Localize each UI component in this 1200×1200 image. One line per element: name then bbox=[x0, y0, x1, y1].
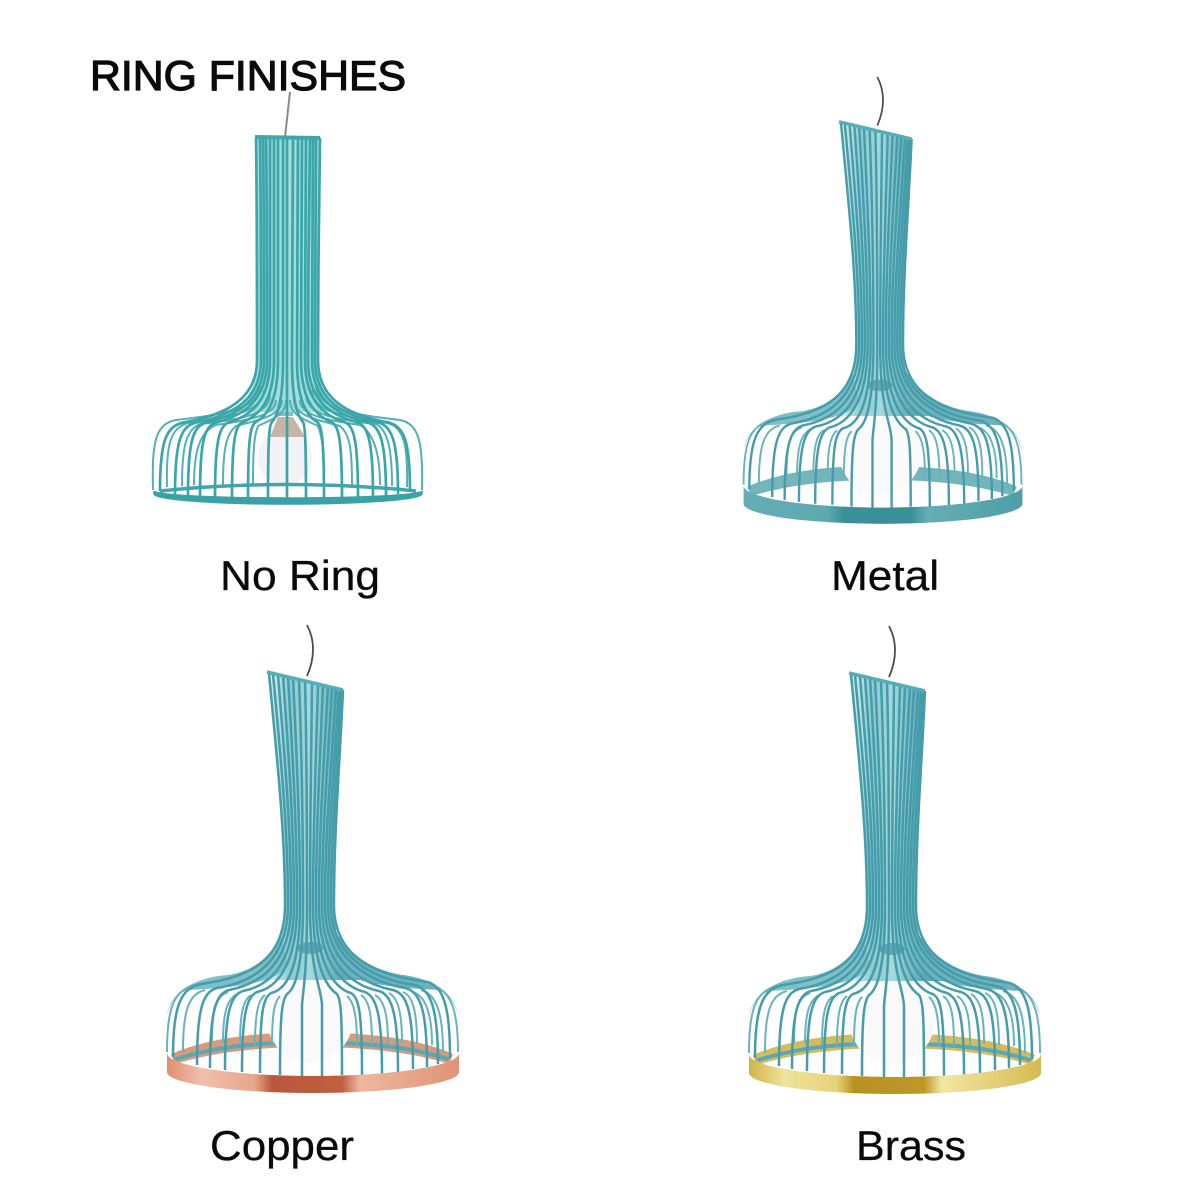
copper ring band bbox=[167, 1053, 459, 1093]
neck fill bbox=[223, 137, 348, 412]
title: RING FINISHES bbox=[90, 52, 406, 99]
wires and neck bbox=[744, 77, 1021, 508]
bulb and socket bbox=[258, 388, 312, 485]
cable bbox=[285, 92, 290, 137]
lamp: copper ring bbox=[167, 625, 459, 1093]
front wires bbox=[160, 138, 410, 501]
brass ring band bbox=[749, 1054, 1041, 1094]
inner ring pieces bbox=[753, 1034, 1035, 1065]
back ring bbox=[160, 484, 416, 491]
wires and neck bbox=[749, 626, 1040, 1077]
lamp: metal ring bbox=[744, 77, 1022, 524]
lamp: brass ring bbox=[749, 626, 1041, 1094]
back wires bbox=[153, 385, 422, 490]
label: metal: Metal bbox=[831, 552, 939, 599]
wires and neck bbox=[167, 625, 458, 1076]
label: no ring: No Ring bbox=[220, 552, 380, 599]
lamp: no ring bbox=[153, 92, 422, 504]
label: brass: Brass bbox=[856, 1122, 966, 1169]
label: copper: Copper bbox=[210, 1122, 354, 1169]
base ring bbox=[154, 491, 422, 504]
inner ring pieces bbox=[747, 467, 1017, 496]
metal ring band bbox=[744, 486, 1022, 524]
inner ring pieces bbox=[171, 1033, 453, 1064]
top rim bbox=[255, 137, 320, 138]
